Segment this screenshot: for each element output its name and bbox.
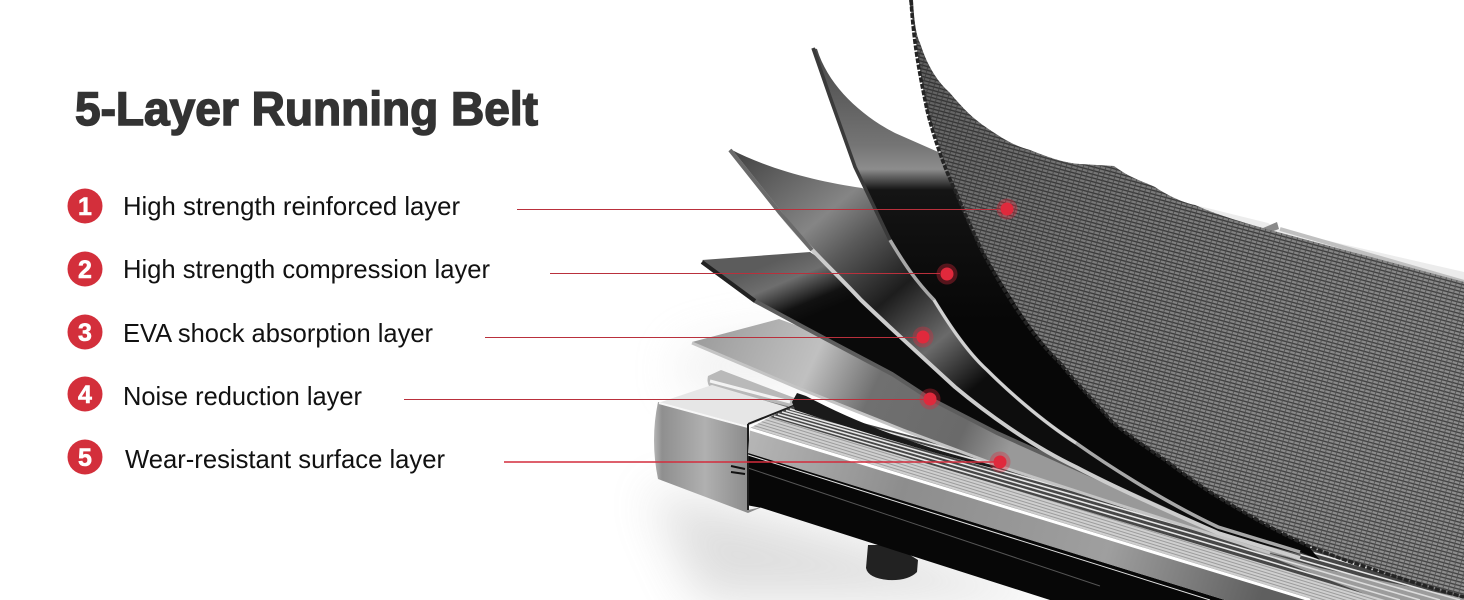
item 3: badge [68, 314, 102, 350]
end cap face [654, 402, 762, 513]
foot [866, 545, 918, 580]
item 4: badge [68, 376, 102, 412]
fine grid tread band [750, 417, 1385, 600]
leader line 5 [504, 461, 996, 463]
layer 3: EVA shock absorption [730, 149, 1300, 558]
item 4: label: Noise reduction layer [123, 381, 362, 411]
marker 2 [936, 264, 958, 284]
black underside [746, 452, 1225, 600]
treadmill base [654, 370, 1464, 600]
rear deck rail [1195, 205, 1464, 300]
item 5: badge [68, 440, 102, 474]
marker 3 [912, 326, 934, 348]
item 5: label: Wear-resistant surface layer [125, 444, 445, 474]
leader line 4 [404, 398, 925, 400]
end cap top [658, 385, 790, 426]
layer 5: wear-resistant surface [692, 319, 1300, 560]
layer 1: high strength reinforced mesh [909, 0, 1464, 597]
title: 5-Layer Running Belt [75, 82, 538, 135]
item 4: badge: 4 [78, 381, 92, 409]
item 1: badge [68, 188, 102, 224]
marker 5 [990, 452, 1010, 472]
leader lines [404, 210, 1000, 462]
layer 2: high strength compression [813, 48, 1320, 560]
item 2: badge: 2 [78, 256, 92, 284]
leader line 1 [517, 208, 1000, 210]
item 1: label: High strength reinforced layer [123, 191, 460, 221]
item 3: label: EVA shock absorption layer [123, 318, 433, 348]
item 2: badge [68, 252, 102, 286]
item 3: badge: 3 [78, 319, 92, 347]
legend list [68, 188, 490, 474]
layer 4: noise reduction [702, 252, 1300, 556]
tread stripes [770, 405, 1464, 600]
silver rail side [748, 428, 1310, 600]
black belt mesh edge [792, 393, 995, 468]
leader line 2 [550, 272, 940, 274]
marker 1 [996, 198, 1018, 220]
item 1: badge: 1 [78, 193, 92, 221]
marker 4 [920, 388, 940, 410]
marker dots [912, 198, 1018, 472]
roller behind end cap [708, 370, 800, 410]
leader line 3 [485, 336, 918, 338]
item 5: badge: 5 [78, 444, 92, 472]
black seam [748, 404, 798, 510]
belt surface light strip near far end [1240, 545, 1464, 600]
soft floor shadow [650, 330, 1080, 600]
item 2: label: High strength compression layer [123, 254, 490, 284]
